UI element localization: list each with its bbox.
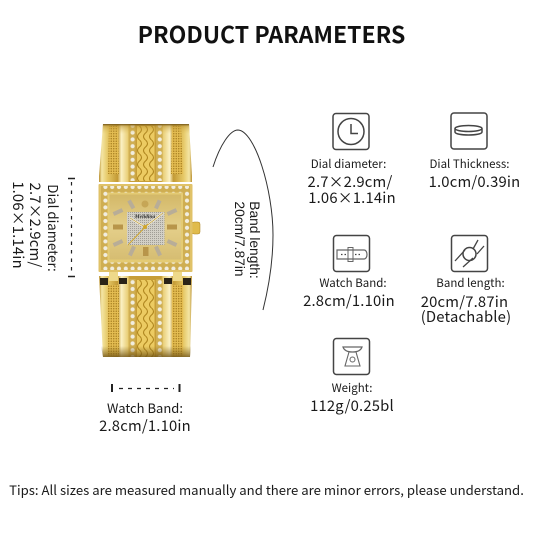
text: Band length: <box>247 201 262 279</box>
tips: Tips: All sizes are measured manually and there are minor errors, please understand. <box>9 480 524 499</box>
spec: band length <box>421 275 511 327</box>
spec: watch band: 2.8cm/1.10in <box>303 290 395 311</box>
crown <box>192 222 200 234</box>
upper band <box>99 124 192 182</box>
label: watch band under photo: Watch Band: <box>107 398 183 417</box>
lower band <box>99 272 192 357</box>
glitter centre <box>127 212 164 245</box>
icon: scale <box>334 338 370 374</box>
spec: dial thickness: Dial Thickness: <box>430 156 509 172</box>
icon: watch band <box>334 236 370 272</box>
spec: watch band: Watch Band: <box>319 275 387 291</box>
text: 20cm/7.87in <box>232 201 246 276</box>
dial height dimension line <box>68 178 75 276</box>
spec: weight: 112g/0.25bl <box>310 395 394 416</box>
label: watch band under photo <box>99 398 191 436</box>
spec: dial thickness <box>429 156 520 192</box>
spec: weight: Weight: <box>332 380 372 396</box>
spec: watch band <box>303 275 395 311</box>
title: PRODUCT PARAMETERS <box>138 16 405 50</box>
spec: dial diameter: 1.06×1.14in <box>308 187 396 208</box>
rotated label: band length <box>232 201 262 279</box>
spec: dial diameter <box>308 156 396 208</box>
text: 1.06×1.14in <box>8 181 29 269</box>
icon: band length <box>452 236 488 272</box>
spec: dial thickness: 1.0cm/0.39in <box>429 171 520 192</box>
rotated label: dial diameter <box>8 181 63 272</box>
brand: Melidina <box>134 214 155 220</box>
band length arc <box>213 130 273 310</box>
band width dimension line <box>112 384 180 392</box>
icon: dial thickness <box>451 113 487 149</box>
icon: clock <box>333 114 369 150</box>
spec: dial diameter: 2.7×2.9cm/ <box>308 171 392 192</box>
label: watch band under photo: 2.8cm/1.10in <box>99 415 191 436</box>
spec: band length: (Detachable) <box>421 306 511 327</box>
spec: band length: 20cm/7.87in <box>421 290 508 312</box>
text: Dial diameter: <box>44 184 63 272</box>
spec: weight <box>310 380 394 416</box>
case <box>98 184 192 272</box>
spec: band length: Band length: <box>436 275 505 291</box>
spec: dial diameter: Dial diameter: <box>311 156 386 172</box>
hands <box>130 213 163 227</box>
hour markers <box>113 200 177 256</box>
text: 2.7×2.9cm/ <box>24 182 46 267</box>
